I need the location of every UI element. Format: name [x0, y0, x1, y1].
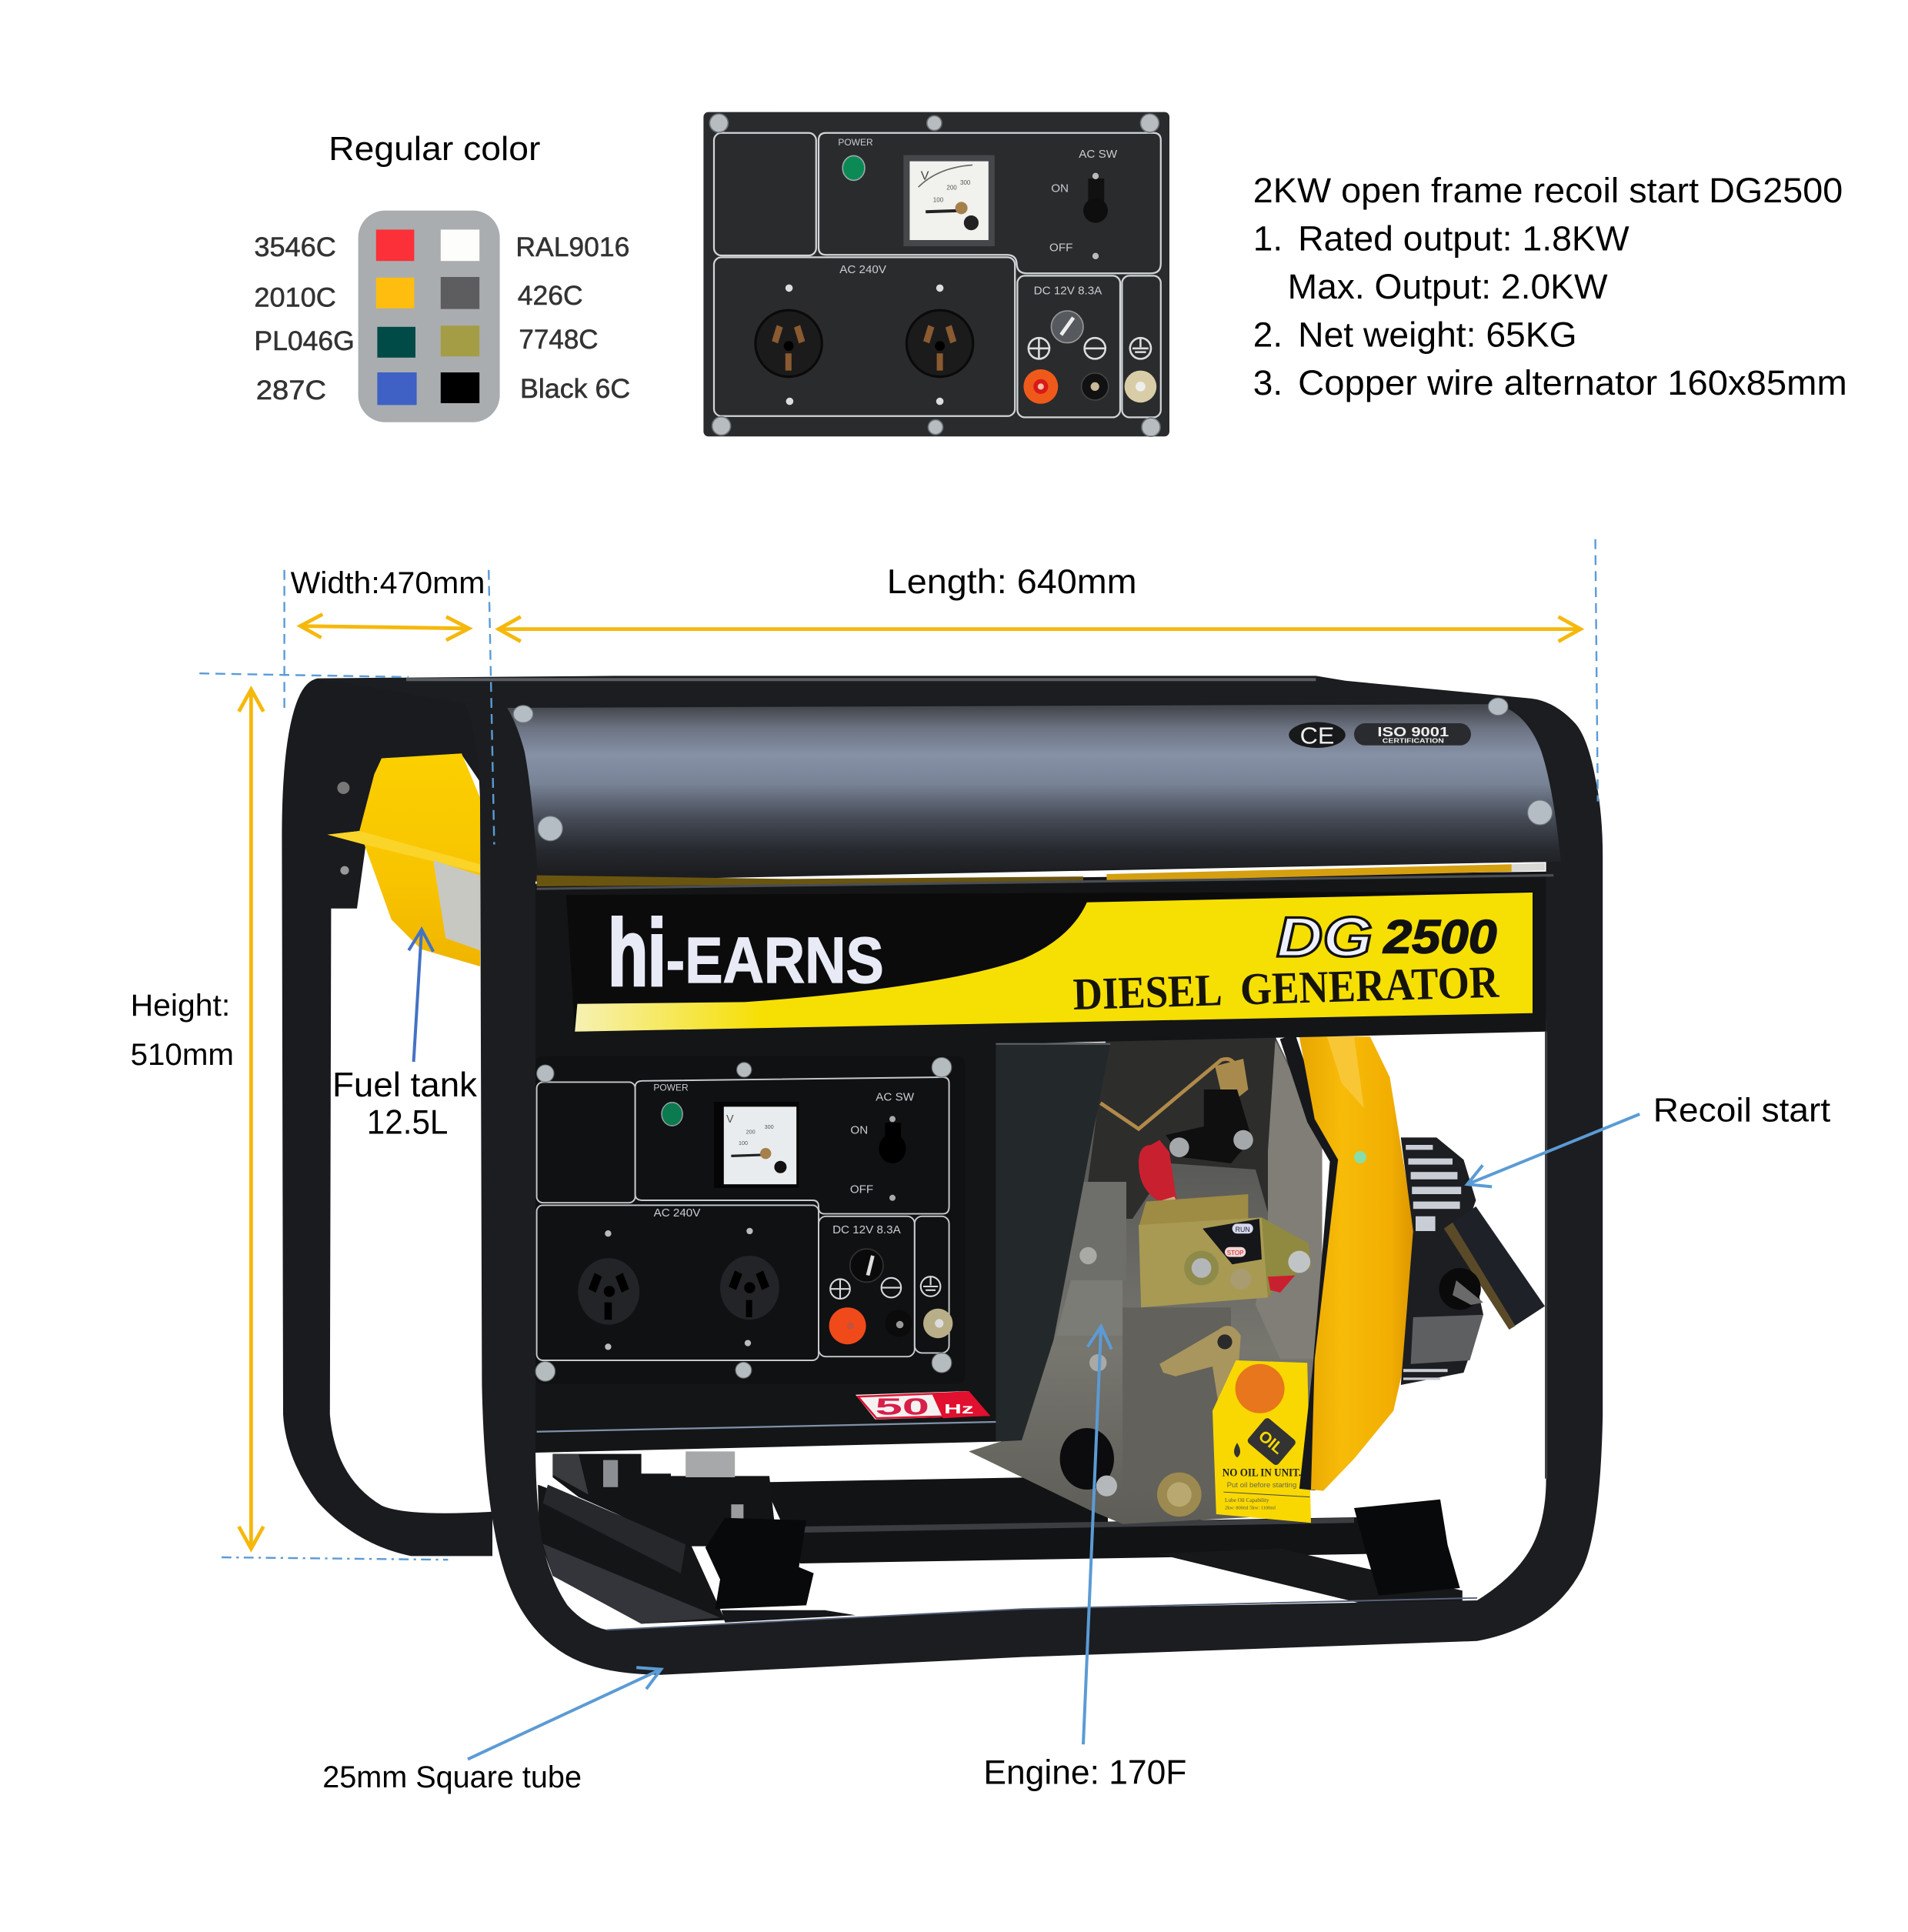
left rubber foot [705, 1518, 814, 1609]
AC switch: AC SW [876, 1090, 915, 1103]
DC terminals [829, 1223, 952, 1344]
control box housing [535, 872, 1549, 1453]
color code labels: 7748C [519, 325, 599, 355]
color code labels: 287C [256, 375, 326, 405]
voltmeter [903, 155, 995, 246]
swatch: 287C blue [377, 372, 417, 405]
label: height [131, 989, 234, 1072]
AC sockets [756, 263, 973, 405]
50Hz badge: 50 [876, 1393, 929, 1420]
AC sockets [578, 1206, 779, 1350]
engine block [969, 1036, 1322, 1524]
AC sockets: AC 240V [654, 1206, 701, 1220]
hood bolts [513, 698, 1553, 841]
ISO 9001 badge [1354, 723, 1471, 746]
oil warning tag: Put oil before starting [1227, 1481, 1296, 1490]
label: fuel tank: 12.5L [367, 1103, 448, 1142]
dimension guide lines [199, 539, 1598, 1560]
AC sockets: AC 240V [839, 263, 887, 276]
label: engine: Engine: 170F [983, 1753, 1186, 1791]
voltmeter: 100 [933, 196, 944, 203]
specification text block: 2. [1253, 315, 1283, 354]
power indicator [653, 1083, 689, 1126]
generator control panel [535, 1056, 965, 1383]
color code labels: PL046G [254, 326, 355, 356]
AC switch [850, 1090, 915, 1201]
color code labels: Black 6C [520, 374, 630, 404]
run stop labels: RUN [1236, 1226, 1250, 1233]
frame bolts rear [337, 782, 349, 794]
swatch: 3546C red [376, 229, 414, 261]
voltmeter: 200 [946, 184, 957, 191]
arrow: length dimension [499, 617, 1580, 642]
red throttle lever [1139, 1140, 1182, 1221]
specification text block: Rated output: 1.8KW [1298, 219, 1629, 259]
arrow: recoil start [1467, 1114, 1639, 1186]
50Hz badge [856, 1391, 989, 1420]
AC switch: OFF [1049, 241, 1072, 254]
right rubber foot [1273, 1487, 1460, 1596]
recoil starter [1401, 1137, 1545, 1385]
AC switch: ON [1051, 182, 1069, 195]
AC switch [1049, 148, 1118, 259]
top rail [318, 676, 1526, 710]
DC terminals: DC 12V 8.3A [1034, 284, 1102, 297]
brand logo: -EARNS [666, 923, 884, 996]
swatch: 7748C olive [441, 325, 479, 356]
swatch: PL046G teal [377, 327, 415, 358]
specification text block [1253, 171, 1847, 402]
rear frame tube [282, 679, 492, 1556]
model name: 2500 [1383, 910, 1497, 963]
model name: DG [1276, 905, 1373, 969]
swatch: Black 6C [441, 372, 479, 403]
oil warning tag: 2kw: 800ml 5kw: 1100ml [1225, 1506, 1276, 1511]
color code labels: 426C [518, 281, 583, 311]
voltmeter: V [921, 170, 929, 183]
label: fuel tank [332, 1066, 478, 1142]
50Hz badge: Hz [944, 1401, 974, 1416]
AC switch: ON [850, 1124, 868, 1137]
panel outlines [714, 133, 1161, 417]
CE mark: CE [1300, 722, 1334, 749]
fuel tank [328, 753, 480, 966]
arrow: engine [1083, 1326, 1112, 1744]
specification text block: Max. Output: 2.0KW [1288, 267, 1608, 306]
AC switch: OFF [850, 1183, 873, 1196]
recoil handle [1444, 1206, 1545, 1330]
yellow flywheel cover [1288, 1036, 1413, 1491]
speed control bracket [1139, 1194, 1248, 1227]
rear cross rails [763, 1476, 1463, 1608]
voltmeter: 200 [746, 1129, 756, 1136]
brand logo [608, 900, 884, 1005]
ISO 9001 badge: CERTIFICATION [1383, 738, 1444, 745]
title: regular color: Regular color [329, 131, 540, 168]
panel outlines [537, 1077, 949, 1360]
arrow: height dimension [239, 689, 263, 1549]
CE mark [1289, 722, 1346, 749]
color code labels: 3546C [254, 232, 336, 262]
hood [507, 698, 1561, 876]
voltmeter: 300 [960, 179, 971, 186]
run stop labels [1225, 1223, 1253, 1257]
drain plug opening [1060, 1428, 1114, 1490]
product name: DIESEL GENERATOR [1072, 956, 1500, 1019]
AC switch: AC SW [1079, 148, 1118, 161]
DC terminals [1023, 284, 1156, 404]
panel background [703, 112, 1169, 436]
arrow: fuel tank [409, 929, 433, 1062]
control box shelf [537, 1422, 996, 1432]
label: width: Width:470mm [291, 566, 485, 600]
label: length: Length: 640mm [887, 562, 1137, 601]
power indicator: POWER [653, 1083, 689, 1093]
color code labels: RAL9016 [515, 232, 629, 262]
left angled skid rail [538, 1485, 725, 1623]
oil warning tag: NO OIL IN UNIT. [1223, 1467, 1301, 1479]
swatch: 426C gray [441, 277, 479, 309]
label: fuel tank: Fuel tank [332, 1066, 478, 1104]
corner bolts [709, 114, 1160, 436]
voltmeter: 300 [765, 1123, 774, 1130]
engine guard plate [996, 1043, 1110, 1442]
specification text block: 3. [1253, 363, 1283, 402]
run stop labels: STOP [1227, 1250, 1243, 1256]
label: square tube: 25mm Square tube [322, 1760, 582, 1794]
voltmeter: V [726, 1113, 734, 1126]
specification text block: 1. [1253, 219, 1283, 259]
voltmeter [714, 1102, 799, 1188]
panel bolts [535, 1057, 952, 1381]
label: recoil start: Recoil start [1653, 1093, 1830, 1130]
swatch backing [359, 211, 500, 422]
specification text block: 2KW open frame recoil start DG2500 [1253, 171, 1843, 210]
specification text block: Net weight: 65KG [1298, 315, 1577, 354]
power indicator: POWER [838, 137, 873, 148]
power indicator [838, 137, 873, 180]
color code labels: 2010C [254, 282, 336, 312]
panel: control panel close-up [703, 112, 1169, 436]
yellow seam below hood [537, 863, 1553, 889]
nameplate [566, 891, 1533, 1032]
arrow: width dimension [300, 614, 469, 640]
model name [1276, 905, 1497, 969]
oil warning tag: Lube Oil Capability [1225, 1497, 1269, 1503]
color code labels [254, 232, 630, 405]
oil warning tag [1213, 1360, 1311, 1523]
ISO 9001 badge: ISO 9001 [1377, 724, 1449, 739]
panel: color swatches [359, 211, 500, 422]
lever arm [1159, 1326, 1241, 1406]
oil warning tag: OIL [1255, 1427, 1287, 1458]
label: height: Height: [131, 989, 230, 1023]
generator illustration [282, 676, 1603, 1675]
specification text block: Copper wire alternator 160x85mm [1298, 363, 1847, 402]
arrow: square tube [468, 1667, 661, 1759]
label: height: 510mm [131, 1038, 234, 1072]
voltmeter: 100 [739, 1140, 748, 1146]
injector base [1166, 1089, 1252, 1163]
DC terminals: DC 12V 8.3A [832, 1223, 902, 1236]
swatch: 2010C yellow [376, 278, 414, 309]
brand logo: hi [608, 900, 666, 1005]
fuel tank rating label [433, 860, 480, 950]
left engine mount [552, 1451, 776, 1547]
swatch: RAL9016 white [441, 229, 479, 261]
front frame tube [462, 697, 1603, 1675]
fuel pipe [1100, 1059, 1236, 1129]
